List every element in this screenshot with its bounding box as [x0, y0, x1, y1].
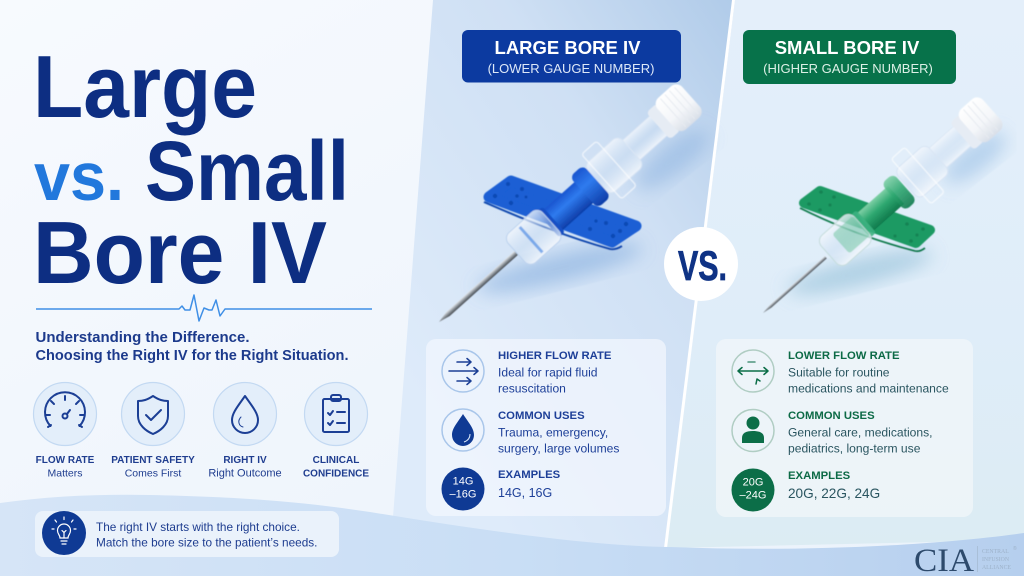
text: flow rate — [788, 350, 949, 396]
header: small bore: (HIGHER GAUGE NUMBER) — [763, 61, 933, 76]
text: flow rate: resuscitation — [498, 382, 566, 396]
logo: CIA: ALLIANCE — [982, 565, 1011, 571]
label: CLINICAL — [313, 455, 359, 466]
text: examples: 14G, 16G — [498, 486, 552, 500]
badge: 14G-16G: –16G — [450, 488, 476, 500]
label: Right Outcome — [208, 468, 282, 480]
label: Matters — [47, 468, 83, 480]
header: large bore: LARGE BORE IV — [495, 37, 641, 58]
header: large bore — [462, 30, 681, 82]
label: RIGHT IV — [223, 455, 267, 466]
badge: 20G-24G: 20G — [743, 476, 763, 488]
title: Large — [33, 37, 257, 136]
text: examples: EXAMPLES — [788, 470, 851, 482]
panel: small bore background — [667, 0, 1024, 548]
title: Bore IV — [33, 203, 327, 302]
header: large bore: (LOWER GAUGE NUMBER) — [488, 61, 654, 76]
icon: drop — [232, 396, 258, 433]
illustration: small bore catheter — [743, 87, 1013, 335]
feature: flow rate — [34, 382, 96, 480]
text: flow rate: Ideal for rapid fluid — [498, 366, 598, 380]
text: common uses: COMMON USES — [498, 410, 585, 422]
text: flow rate: HIGHER FLOW RATE — [498, 350, 612, 362]
text: common uses: pediatrics, long-term use — [788, 442, 921, 456]
callout: tip — [35, 511, 339, 557]
heartbeat divider — [36, 295, 372, 321]
title — [33, 37, 349, 302]
card: small bore details — [716, 339, 973, 517]
panel: large bore background — [392, 0, 735, 548]
title: Small — [145, 124, 349, 218]
text: flow rate: medications and maintenance — [788, 382, 949, 396]
tip text: The right IV starts with the right choice. — [96, 520, 300, 534]
label: PATIENT SAFETY — [111, 455, 195, 466]
label: FLOW RATE — [36, 455, 95, 466]
icon: shield — [138, 396, 168, 434]
header: small bore — [743, 30, 956, 84]
subtitle: Understanding the Difference. — [36, 330, 250, 346]
badge: VS: VS. — [678, 242, 727, 289]
feature: patient safety — [111, 382, 195, 480]
icon: light bulb — [52, 517, 76, 544]
text: common uses: COMMON USES — [788, 410, 875, 422]
text: examples — [788, 470, 880, 501]
header: small bore: SMALL BORE IV — [775, 37, 920, 58]
logo: CIA: INFUSION — [982, 557, 1010, 563]
icon: drop — [442, 409, 484, 451]
badge: 14G-16G: 14G — [453, 476, 473, 488]
title: vs. — [34, 139, 124, 215]
logo: CIA: ® — [1013, 545, 1017, 552]
text: common uses: surgery, large volumes — [498, 442, 619, 456]
badge: 20G-24G: –24G — [740, 490, 766, 502]
badge: 14G-16G — [442, 468, 484, 510]
icon: gauge — [45, 392, 85, 427]
subtitle: Choosing the Right IV for the Right Situation. — [36, 348, 348, 364]
text: examples: EXAMPLES — [498, 469, 561, 481]
bottom wave — [0, 495, 1024, 576]
badge: 20G-24G — [732, 468, 774, 512]
badge: VS — [664, 227, 738, 301]
icon: clipboard — [323, 395, 349, 432]
text: common uses — [788, 410, 933, 456]
text: flow rate: LOWER FLOW RATE — [788, 350, 900, 362]
illustration: large bore catheter — [419, 74, 716, 344]
tip text: Match the bore size to the patient’s needs. — [96, 536, 317, 550]
icon: low flow arrows — [732, 350, 774, 392]
label: Comes First — [125, 468, 181, 480]
icon: flow arrows — [442, 350, 484, 392]
text: examples: 20G, 22G, 24G — [788, 486, 880, 501]
label: CONFIDENCE — [303, 468, 369, 480]
subtitle — [36, 330, 348, 364]
card: large bore details — [426, 339, 666, 516]
feature: right IV — [208, 382, 282, 480]
white diagonal divider — [664, 0, 735, 548]
text: flow rate: Suitable for routine — [788, 366, 890, 380]
text: common uses: General care, medications, — [788, 426, 933, 440]
logo: CIA — [914, 543, 1017, 576]
icon: person — [732, 410, 774, 452]
logo: CIA: CENTRAL — [982, 549, 1009, 555]
feature: clinical confidence — [303, 382, 369, 480]
text: common uses: Trauma, emergency, — [498, 426, 608, 440]
